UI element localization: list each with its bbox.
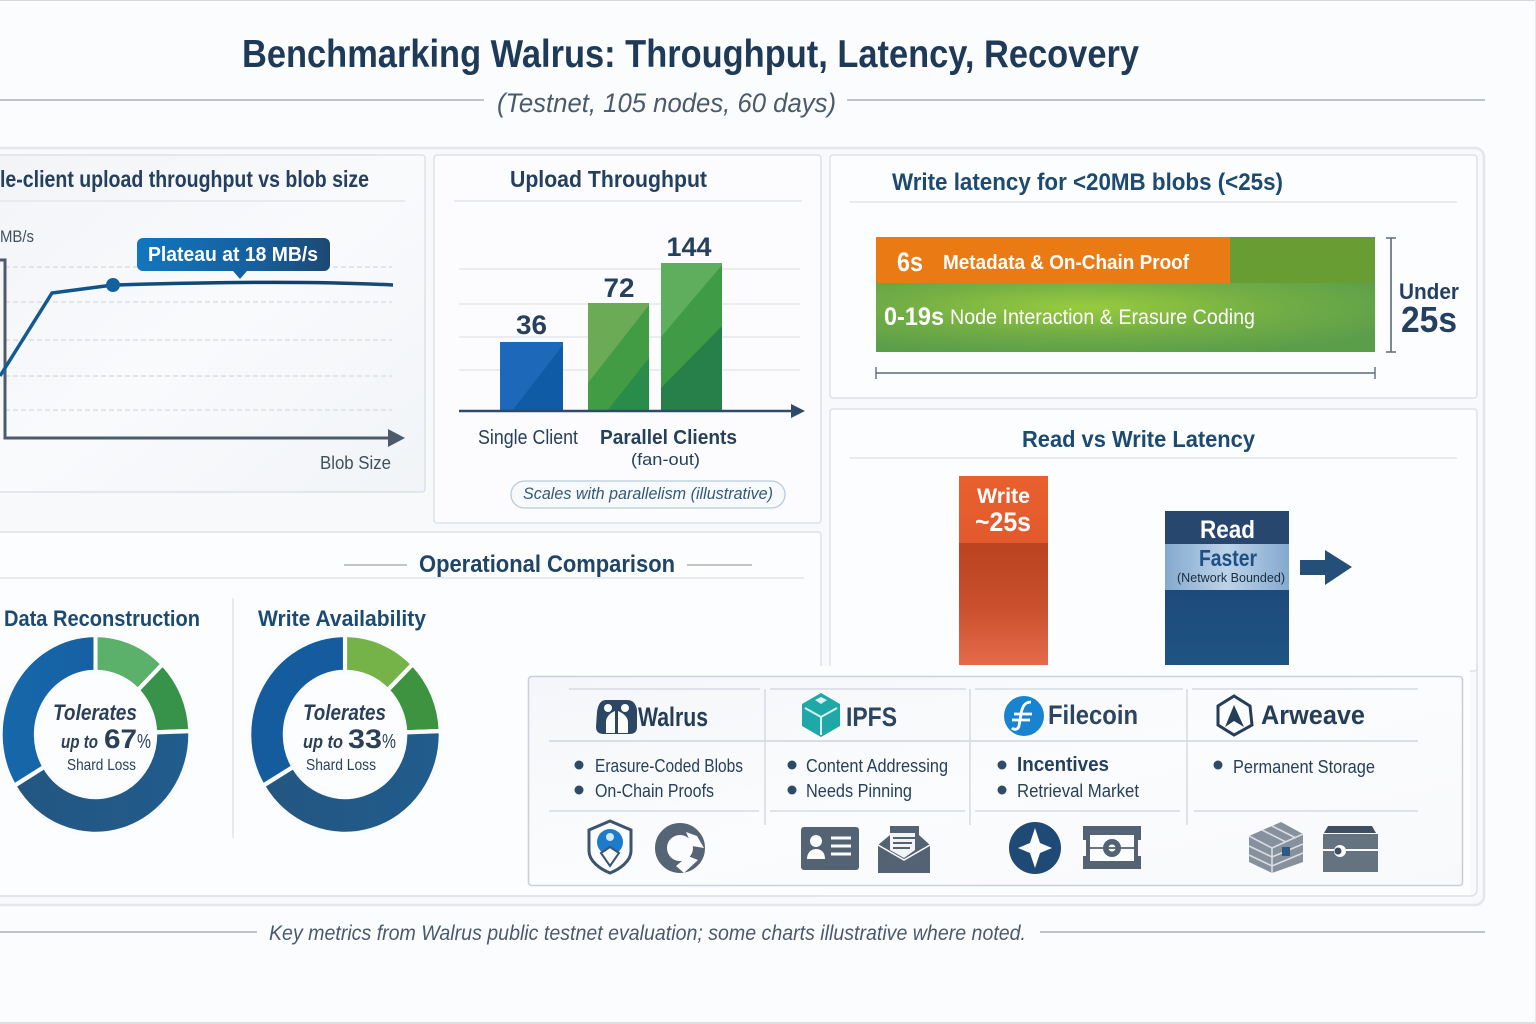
donut label: 67%: %: [137, 731, 151, 753]
donut: data reconstruction: [1, 635, 190, 834]
icon: film ticket: [1083, 826, 1141, 869]
donut label: 67%: Shard Loss: [67, 757, 136, 774]
icon: IPFS cube: [802, 693, 840, 737]
segment: metadata: Metadata & On-Chain Proof: [943, 252, 1189, 274]
panel: operational comparison: [0, 532, 821, 896]
name: Filecoin: Filecoin: [1048, 700, 1138, 730]
icon: shield: [589, 821, 631, 873]
donut label: 67%: Tolerates: [53, 700, 137, 725]
axes: [0, 260, 405, 447]
column: IPFS: [788, 693, 948, 873]
name: IPFS: IPFS: [846, 702, 897, 732]
bar: parallel clients 72: [588, 273, 649, 411]
icon: Arweave logo: [1218, 696, 1252, 735]
panel heading: Write latency for <20MB blobs (<25s): [892, 169, 1283, 196]
bar: parallel clients 144: 144: [666, 232, 712, 262]
icon: walrus logo: [596, 700, 637, 734]
heading: write availability: Write Availability: [258, 606, 427, 631]
label: parallel clients: (fan-out): [631, 450, 700, 469]
donut label: 67%: 67: [104, 724, 137, 754]
bar: write: Write: [977, 485, 1030, 508]
panel heading: le-client upload throughput vs blob size: [0, 166, 369, 192]
segment: node interaction: [876, 283, 1375, 352]
x axis label: Blob Size: [320, 453, 391, 473]
segment: metadata: [876, 237, 1375, 283]
name: Arweave: Arweave: [1261, 700, 1365, 730]
arrow: read direction: [1300, 550, 1352, 585]
plateau marker: [106, 278, 120, 292]
note pill: Scales with parallelism (illustrative): [523, 484, 773, 503]
bar: read: [1165, 511, 1289, 665]
subtitle: (Testnet, 105 nodes, 60 days): [497, 88, 836, 118]
footer note: Key metrics from Walrus public testnet evaluation; some charts illustrative where noted.: [269, 922, 1026, 945]
label: parallel clients: [600, 427, 737, 469]
donut label: 67%: [53, 700, 151, 774]
panel heading: Read vs Write Latency: [1022, 426, 1255, 452]
total label: 25s: [1401, 299, 1457, 340]
scale line: [876, 367, 1375, 379]
panel heading: Operational Comparison: [419, 551, 675, 578]
donut label: 33%: [303, 700, 396, 774]
title: Benchmarking Walrus: Throughput, Latency, Recovery: [242, 33, 1139, 76]
callout: plateau: Plateau at 18 MB/s: [148, 244, 318, 266]
icon: envelope: [878, 826, 930, 873]
icon: Filecoin logo: [1004, 696, 1044, 736]
panel: single-client throughput: [0, 155, 425, 492]
throughput line: [0, 282, 393, 376]
icon: compass: [1009, 822, 1061, 874]
icon: id card: [801, 827, 859, 870]
features: Filecoin: Incentives: [1017, 754, 1109, 776]
total label: [1399, 279, 1459, 340]
column: Arweave: [1214, 696, 1378, 873]
bar: write: [959, 476, 1048, 665]
bracket: [1386, 238, 1396, 352]
features: Walrus: [574, 756, 743, 801]
panel: protocol comparison: [0, 664, 1477, 896]
icon: chest: [1323, 826, 1378, 872]
segment: node interaction: 0-19s: [884, 303, 944, 331]
features: Filecoin: [998, 754, 1139, 801]
panel: upload throughput: [434, 155, 821, 523]
bar: read: Read: [1200, 516, 1255, 544]
features: Arweave: Permanent Storage: [1233, 757, 1375, 777]
features: IPFS: Needs Pinning: [806, 781, 912, 801]
donut label: 33%: Tolerates: [303, 700, 386, 725]
heading: data reconstruction: Data Reconstruction: [4, 606, 200, 631]
bar: parallel clients 72: 72: [604, 273, 634, 303]
donut label: 33%: 33: [348, 724, 382, 754]
callout: plateau: [137, 238, 330, 279]
features: Walrus: Erasure-Coded Blobs: [595, 756, 743, 776]
y axis label: MB/s: [0, 227, 34, 246]
bar: read: Faster: [1199, 545, 1257, 571]
features: Filecoin: Retrieval Market: [1017, 781, 1139, 801]
donut label: 33%: %: [382, 731, 396, 753]
bar: single client 36: [500, 310, 563, 411]
features: IPFS: Content Addressing: [806, 756, 948, 776]
donut: write availability: [249, 635, 441, 834]
label: single client: Single Client: [478, 427, 578, 449]
features: IPFS: [788, 756, 948, 801]
bar: single client 36: 36: [516, 310, 547, 340]
x axis: [459, 404, 805, 418]
segment: node interaction: Node Interaction & Erasure Coding: [950, 306, 1255, 329]
column: Filecoin: [998, 696, 1141, 874]
icon: server stack: [1249, 822, 1303, 873]
panel heading: Upload Throughput: [510, 166, 707, 192]
bar: parallel clients 144: [661, 232, 722, 411]
segment: metadata: 6s: [897, 247, 923, 277]
panel: read vs write latency: [830, 409, 1477, 671]
label: parallel clients: Parallel Clients: [600, 427, 737, 449]
donut label: 33%: Shard Loss: [306, 757, 376, 774]
note pill: [511, 481, 785, 508]
column: Walrus: [574, 700, 743, 873]
bar: read: (Network Bounded): [1177, 571, 1285, 585]
name: Walrus: Walrus: [638, 702, 708, 732]
features: Walrus: On-Chain Proofs: [595, 781, 714, 801]
panel: write latency: [830, 155, 1477, 398]
donut label: 33%: up to: [303, 732, 343, 752]
bar: write: ~25s: [975, 507, 1031, 537]
donut label: 67%: up to: [61, 732, 98, 752]
icon: ring: [661, 829, 704, 873]
total label: Under: [1399, 279, 1459, 304]
